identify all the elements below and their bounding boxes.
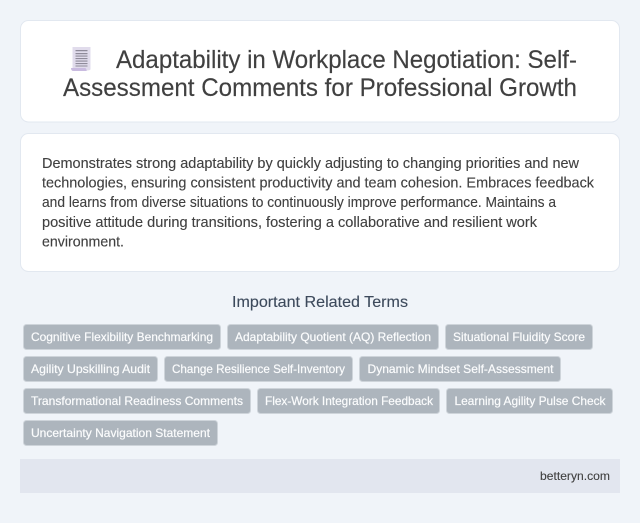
description text: technologies, ensuring consistent productivity and team cohesion. Embraces feedback [42, 176, 595, 192]
tag [258, 388, 440, 414]
title: Adaptability in Workplace Negotiation: Self- [116, 46, 577, 74]
footer source text: betteryn.com [540, 469, 610, 483]
tag: Cognitive Flexibility Benchmarking [31, 330, 213, 344]
tag [24, 420, 218, 446]
tag [228, 324, 438, 350]
tag: Change Resilience Self-Inventory [172, 362, 345, 376]
description text: and learns from diverse situations to continuously improve performance. Maintains a [42, 195, 556, 211]
header panel [20, 20, 620, 122]
tag: Dynamic Mindset Self-Assessment [368, 362, 554, 376]
tag [446, 324, 592, 350]
title: Assessment Comments for Professional Growth [63, 74, 577, 102]
heading: important related terms: Important Related Terms [232, 294, 408, 311]
tag: Agility Upskilling Audit [31, 362, 151, 376]
tag: Uncertainty Navigation Statement [31, 426, 211, 440]
tag: Transformational Readiness Comments [31, 394, 243, 408]
tag [446, 388, 612, 414]
title [63, 46, 577, 102]
tag: Situational Fluidity Score [453, 330, 585, 344]
footer [20, 459, 620, 493]
tag [164, 356, 352, 382]
description text: environment. [42, 234, 124, 250]
tag [360, 356, 560, 382]
description text [42, 156, 595, 250]
description text: positive attitude during transitions, fostering a collaborative and resilient work [42, 215, 538, 231]
icon: document scroll [71, 47, 90, 71]
tag [24, 356, 158, 382]
tag: Learning Agility Pulse Check [454, 394, 606, 408]
tag list [24, 324, 612, 446]
tag [24, 324, 220, 350]
tag: Adaptability Quotient (AQ) Reflection [235, 330, 431, 344]
description panel [20, 134, 620, 272]
tag: Flex-Work Integration Feedback [265, 394, 434, 408]
description text: Demonstrates strong adaptability by quickly adjusting to changing priorities and new [42, 156, 580, 172]
tag [24, 388, 250, 414]
